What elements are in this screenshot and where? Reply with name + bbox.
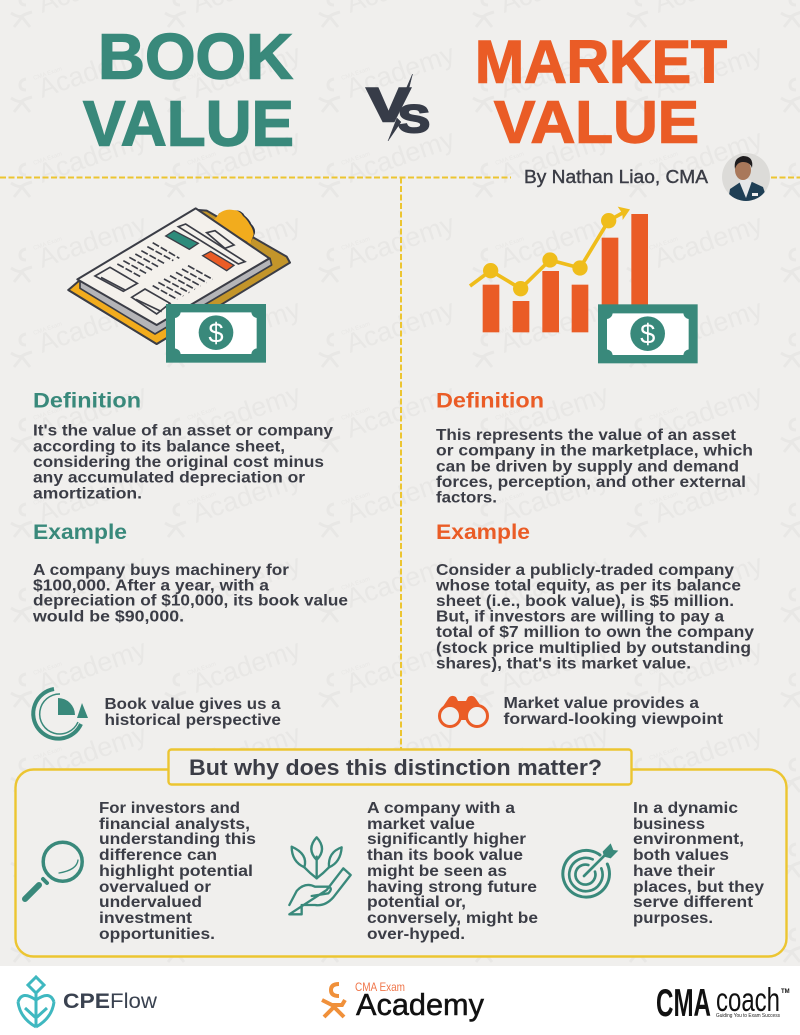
text: investors: investment	[99, 910, 192, 927]
panel: market value example: But, if investors are willing to pay a	[436, 608, 724, 625]
panel: market value example	[435, 520, 755, 672]
text: investors: For investors and	[99, 800, 240, 817]
panel: book value definition: Definition	[33, 388, 141, 412]
text: company: might be seen as	[367, 863, 507, 880]
text: investors: overvalued or	[99, 879, 211, 896]
takeaway: book value: historical perspective	[104, 712, 281, 729]
takeaway: market value: Market value provides a	[504, 695, 699, 712]
panel: book value definition: considering the original cost minus	[33, 454, 324, 471]
text: company: potential or,	[367, 894, 466, 911]
icon: banknote right	[598, 304, 698, 363]
title: market value	[475, 28, 727, 156]
icon: magnifying glass	[25, 842, 82, 899]
icon: clipboard with papers and banknote	[68, 208, 290, 344]
text: company: significantly higher	[367, 831, 526, 848]
panel: book value example: Example	[33, 520, 127, 544]
title: book value: BOOK	[98, 20, 293, 92]
text: investors: financial analysts,	[99, 816, 250, 833]
icon: banknote left	[166, 304, 266, 363]
panel: book value definition: It's the value of an asset or company	[33, 423, 333, 440]
panel: market value definition: can be driven by supply and demand	[436, 459, 739, 476]
panel: why it matters	[16, 750, 786, 956]
dividers	[0, 178, 800, 750]
panel: market value example: Example	[436, 520, 530, 544]
panel: book value example: $100,000. After a year, with a	[33, 577, 269, 594]
title: book value	[83, 20, 294, 160]
text: investors: undervalued	[99, 894, 202, 911]
text: company: A company with a	[367, 800, 515, 817]
title: book value: VALUE	[83, 88, 294, 160]
text: dynamic business: serve different	[633, 894, 753, 911]
panel: market value definition: factors.	[436, 489, 497, 506]
panel: book value example	[32, 520, 348, 625]
panel: market value example: whose total equity, as per its balance	[435, 577, 741, 594]
vs badge: S	[398, 98, 430, 141]
panel: market value definition: Definition	[436, 388, 544, 412]
panel: book value example: would be $90,000.	[32, 608, 184, 625]
icon: binoculars	[440, 696, 488, 726]
vs badge: V	[367, 78, 411, 131]
text: dynamic business: purposes.	[633, 910, 713, 927]
logo: cpeflow	[18, 977, 158, 1027]
text: investors	[99, 800, 256, 943]
icon: clock history	[33, 689, 88, 739]
panel: market value example: shares), that's its market value.	[436, 655, 691, 672]
logo: cma exam academy	[322, 980, 484, 1022]
text: dynamic business: In a dynamic	[633, 800, 738, 817]
panel: market value definition	[436, 388, 753, 506]
panel: book value definition: any accumulated depreciation or	[33, 470, 305, 487]
text: investors: opportunities.	[99, 926, 215, 943]
logo: cpeflow: CPE	[63, 990, 110, 1013]
heading: why it matters	[168, 750, 632, 784]
logo: cma coach: TM	[781, 989, 790, 995]
panel: market value example: (stock price multiplied by outstanding	[436, 640, 751, 657]
logo: cma coach: Guiding You to Exam Success	[716, 1013, 780, 1019]
vs badge	[367, 74, 430, 141]
author photo	[722, 153, 770, 202]
panel: market value definition: This represents the value of an asset	[436, 427, 736, 444]
icon: banknote left: $	[208, 317, 224, 348]
logo: cma coach: CMA	[656, 982, 711, 1025]
takeaway: market value: forward-looking viewpoint	[504, 711, 723, 728]
title: market value: MARKET	[475, 28, 727, 96]
text: investors: highlight potential	[99, 863, 253, 880]
text: dynamic business: both values	[633, 847, 729, 864]
text: company: over-hyped.	[367, 926, 465, 943]
icon: target and arrow	[563, 843, 618, 897]
takeaway: book value	[104, 696, 281, 729]
byline: By Nathan Liao, CMA	[524, 167, 708, 187]
text: dynamic business: have their	[633, 863, 715, 880]
logo: cpeflow: Flow	[110, 990, 158, 1013]
text: company: than its book value	[367, 847, 523, 864]
text: dynamic business: business	[633, 816, 705, 833]
text: company: having strong future	[367, 879, 537, 896]
logo: cma exam academy: Academy	[356, 987, 484, 1022]
panel: book value definition: according to its balance sheet,	[33, 439, 285, 456]
icon: banknote right: $	[640, 318, 655, 349]
text: dynamic business: environment,	[633, 831, 744, 848]
text: investors: difference can	[99, 847, 217, 864]
takeaway: book value: Book value gives us a	[104, 696, 281, 713]
takeaway: market value	[504, 695, 723, 728]
panel: book value definition	[33, 388, 333, 503]
panel: market value example: Consider a publicly-traded company	[436, 562, 734, 579]
logo: cma coach	[656, 981, 790, 1025]
icon: plant in hand	[289, 837, 351, 914]
panel: book value example: depreciation of $10,000, its book value	[33, 593, 348, 610]
panel: market value definition: or company in the marketplace, which	[436, 443, 753, 460]
text: company: market value	[367, 816, 475, 833]
text: dynamic business: places, but they	[633, 879, 764, 896]
logo: cma exam academy: CMA Exam	[355, 980, 405, 994]
title: market value: VALUE	[494, 90, 699, 156]
icon: bar chart with trend line	[470, 207, 648, 332]
footer	[0, 966, 800, 1035]
panel: market value example: sheet (i.e., book value), is $5 million.	[436, 593, 734, 610]
text: investors: understanding this	[99, 831, 256, 848]
text: company	[367, 800, 538, 943]
text: dynamic business	[633, 800, 764, 927]
heading: why it matters: But why does this distinction matter?	[189, 755, 602, 780]
text: company: conversely, might be	[367, 910, 538, 927]
panel: market value definition: forces, perception, and other external	[436, 474, 746, 491]
panel: book value definition: amortization.	[33, 486, 142, 503]
panel: book value example: A company buys machinery for	[33, 562, 289, 579]
panel: market value example: total of $7 million to own the company	[436, 624, 755, 641]
